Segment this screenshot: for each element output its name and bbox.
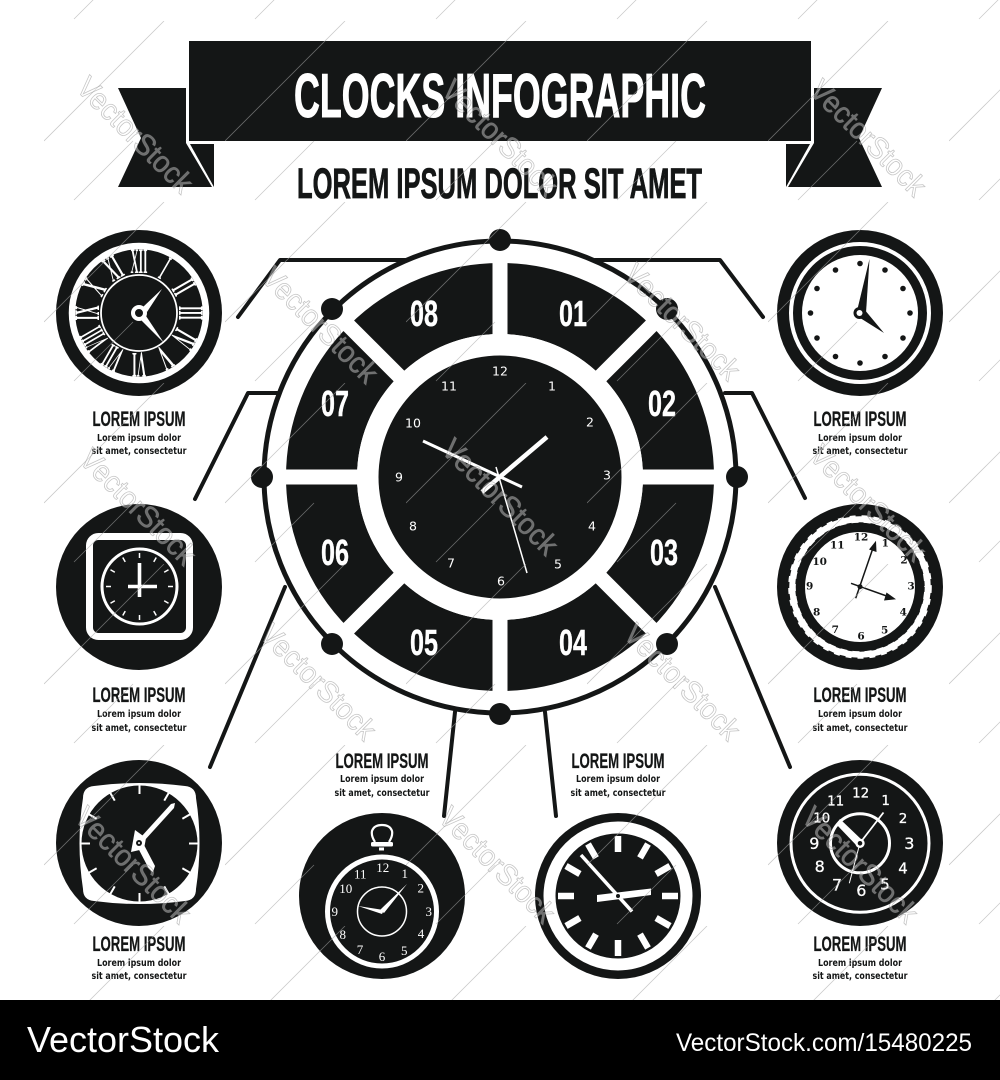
label: middle right [812, 684, 908, 734]
clock numerals: 12 [492, 364, 508, 378]
watermark text: VectorStock [253, 618, 383, 748]
icon: squircle clock [56, 760, 222, 926]
watermark text: VectorStock [617, 258, 747, 388]
segment numbers: 07 [321, 383, 349, 424]
segment numbers: 02 [648, 383, 676, 424]
label: bottom right: Lorem ipsum dolor [818, 958, 902, 969]
watermark text: VectorStock [795, 801, 925, 931]
watermark text: VectorStock [803, 74, 933, 204]
label: middle left [92, 684, 187, 734]
icon: serif numeral clock: 4 [900, 607, 907, 619]
icon: white numeral clock [777, 760, 943, 926]
watermark text: VectorStock [68, 801, 198, 931]
label: bottom right: LOREM IPSUM [814, 933, 906, 956]
segment numbers: 01 [559, 293, 587, 334]
label: top left: sit amet, consectetur [92, 446, 187, 457]
segment numbers: 05 [410, 622, 438, 663]
label: bottom center right: LOREM IPSUM [572, 750, 664, 773]
icon: pocket watch: 7 [357, 942, 364, 957]
icon: roman numeral clock: IV [163, 323, 205, 355]
clock numerals: 3 [603, 468, 611, 482]
watermark text: VectorStock [432, 801, 562, 931]
segment numbers: 06 [321, 532, 349, 573]
label: bottom left: Lorem ipsum dolor [97, 958, 181, 969]
label: top right: Lorem ipsum dolor [818, 433, 902, 444]
icon: square clock [56, 504, 222, 670]
icon: white numeral clock: 6 [856, 881, 866, 900]
icon: serif numeral clock [777, 504, 943, 670]
clock face [378, 356, 622, 598]
label: bottom center right: sit amet, consectetur [570, 788, 666, 799]
icon: roman numeral clock: VIII [72, 320, 116, 358]
label: top right [812, 408, 908, 457]
icon: serif numeral clock: 9 [806, 581, 813, 593]
icon: serif numeral clock: 6 [857, 631, 865, 643]
icon: pocket watch: 12 [376, 860, 389, 875]
label: middle right: sit amet, consectetur [812, 723, 908, 734]
segment numbers: 08 [410, 293, 438, 334]
icon: bar marker clock [535, 813, 701, 979]
icon: pocket watch: 10 [339, 881, 352, 896]
clock numerals: 10 [405, 416, 421, 430]
connector lines [195, 260, 805, 816]
icon: pocket watch: 5 [401, 943, 408, 958]
label: middle left: LOREM IPSUM [92, 684, 186, 707]
label: bottom center right: Lorem ipsum dolor [576, 774, 660, 785]
clock numerals: 8 [409, 518, 417, 534]
icon: pocket watch [299, 813, 465, 979]
central clock diagram [251, 229, 748, 725]
icon: pocket watch: 6 [379, 949, 386, 964]
icon: white numeral clock: 7 [832, 876, 842, 894]
label: top left: Lorem ipsum dolor [97, 433, 181, 444]
clock numerals: 5 [554, 556, 562, 572]
label: middle left: Lorem ipsum dolor [97, 709, 181, 720]
clock numerals: 11 [441, 378, 457, 394]
label: bottom center left: Lorem ipsum dolor [340, 774, 424, 785]
clock numerals: 1 [548, 378, 556, 394]
icon: serif numeral clock: 5 [881, 625, 888, 637]
icon: white numeral clock: 10 [813, 811, 830, 827]
icon: white numeral clock: 8 [815, 857, 825, 876]
icon: white numeral clock: 11 [827, 794, 844, 810]
icon: roman numeral clock [56, 230, 222, 396]
watermark text: VectorStock [70, 71, 200, 201]
icon: pocket watch: 9 [331, 904, 338, 919]
ring dots [251, 229, 748, 725]
icon: roman numeral clock: I [153, 250, 177, 286]
icon: white numeral clock: 4 [898, 859, 908, 877]
footer logo: VectorStock [27, 1019, 220, 1060]
segmented ring [278, 255, 722, 699]
watermark text: VectorStock [255, 261, 385, 391]
label: top right: sit amet, consectetur [812, 446, 908, 457]
label: middle right: LOREM IPSUM [814, 684, 906, 707]
icon: roman numeral clock: II [164, 273, 204, 301]
icon: pocket watch: 3 [425, 904, 432, 919]
icon: white numeral clock: 2 [899, 811, 907, 827]
label: top left: LOREM IPSUM [92, 408, 186, 431]
icon: roman numeral clock: XII [130, 241, 148, 281]
label: bottom center right [570, 750, 666, 799]
outer ring [264, 241, 736, 713]
segment numbers: 04 [559, 622, 587, 663]
icon: white numeral clock: 5 [880, 875, 890, 893]
icon: roman numeral clock: VI [132, 345, 146, 385]
title banner [118, 41, 882, 187]
label: bottom left: LOREM IPSUM [92, 933, 186, 956]
icon: pocket watch: 2 [417, 880, 424, 896]
watermark text [68, 71, 933, 931]
icon: roman numeral clock: X [74, 272, 114, 302]
icon: white numeral clock: 9 [809, 834, 819, 853]
clock numerals [395, 364, 611, 588]
label: top right: LOREM IPSUM [814, 408, 906, 431]
icon: serif numeral clock: 11 [830, 539, 845, 551]
left ribbon tail [118, 88, 214, 187]
icon: serif numeral clock: 8 [813, 607, 820, 619]
label: middle left: sit amet, consectetur [92, 723, 187, 734]
icon: serif numeral clock: 1 [882, 537, 889, 549]
label: bottom right: sit amet, consectetur [812, 971, 908, 982]
banner body [189, 41, 811, 141]
icon: pocket watch: 8 [339, 927, 346, 942]
right ribbon tail [786, 88, 882, 187]
icon: serif numeral clock: 10 [812, 556, 827, 568]
icon: white numeral clock: 1 [881, 793, 890, 809]
icon: white numeral clock: 3 [904, 834, 914, 853]
label: bottom center left [334, 750, 430, 799]
label: bottom center left: LOREM IPSUM [336, 750, 428, 773]
clock hands [423, 437, 547, 573]
icon: serif numeral clock: 7 [832, 624, 839, 636]
watermark text: VectorStock [73, 443, 203, 573]
icon: serif numeral clock: 2 [900, 555, 908, 567]
subtitle: LOREM IPSUM DOLOR SIT AMET [297, 160, 702, 208]
label: bottom right [812, 933, 908, 982]
label: bottom left [92, 933, 187, 982]
watermark text: VectorStock [803, 439, 933, 569]
clock numerals: 6 [497, 574, 505, 588]
icon: serif numeral clock: 12 [854, 531, 868, 543]
icon: pocket watch: 4 [418, 926, 425, 941]
icon: dotted clock [777, 230, 943, 396]
clock numerals: 7 [447, 556, 455, 570]
label: top left [92, 408, 187, 457]
icon: white numeral clock: 12 [852, 785, 869, 801]
watermark text: VectorStock [617, 618, 747, 748]
label: middle right: Lorem ipsum dolor [818, 709, 902, 720]
icon: pocket watch: 11 [354, 866, 367, 882]
clock numerals: 2 [586, 414, 594, 430]
footer bar [0, 1000, 1000, 1080]
footer image id: VectorStock.com/15480225 [676, 1029, 972, 1057]
icon: roman numeral clock: V [150, 338, 180, 378]
icon: roman numeral clock: VII [96, 336, 130, 380]
label: bottom center left: sit amet, consectetur [334, 788, 430, 799]
icon: serif numeral clock: 3 [907, 581, 915, 593]
icon: roman numeral clock: III [171, 306, 211, 320]
clock numerals: 4 [588, 518, 596, 534]
title: CLOCKS INFOGRAPHIC [294, 62, 706, 131]
icon: roman numeral clock: XI [97, 247, 129, 289]
segment numbers: 03 [650, 532, 678, 573]
icon: roman numeral clock: IX [67, 306, 107, 320]
segment numbers [321, 293, 678, 663]
label: bottom left: sit amet, consectetur [92, 971, 187, 982]
watermark text: VectorStock [435, 433, 565, 563]
clock numerals: 9 [395, 470, 403, 484]
icon: pocket watch: 1 [401, 866, 408, 881]
watermark text: VectorStock [435, 74, 565, 204]
